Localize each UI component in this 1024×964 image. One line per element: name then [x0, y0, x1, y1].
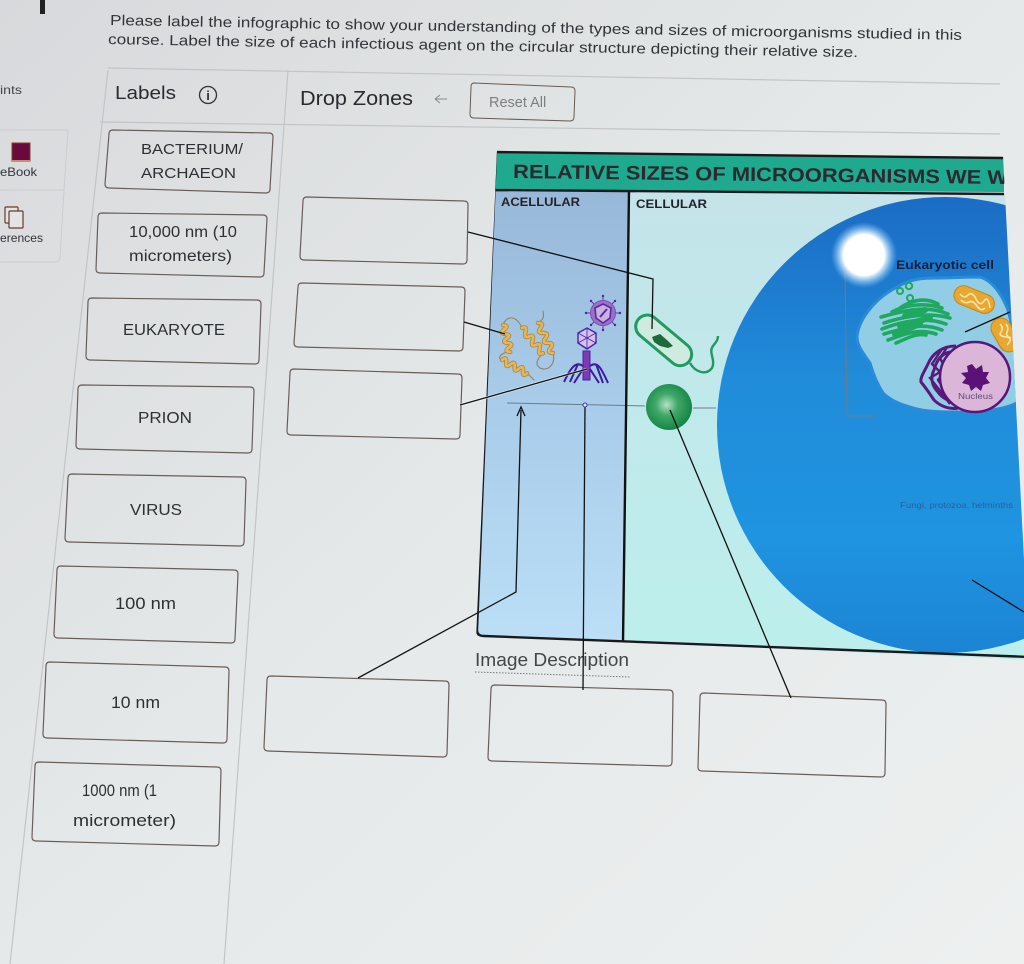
label: bacterium/archaeon — [105, 130, 273, 193]
drop zone 3 — [287, 369, 462, 439]
labels heading — [115, 83, 216, 104]
icon: bacterial sphere — [646, 384, 692, 430]
axis marker — [583, 403, 587, 407]
eukaryotic cell — [857, 258, 1024, 412]
drop zone 5 — [488, 685, 673, 766]
chart frame — [477, 152, 1024, 657]
drop zone 2 — [294, 283, 465, 351]
header bar: RELATIVE SIZES OF MICROORGANISMS WE W — [513, 161, 1009, 189]
reset button — [470, 83, 575, 121]
label: bacterium/archaeon: ARCHAEON — [141, 165, 236, 182]
label: 1000 nm: 1000 nm (1 — [82, 781, 157, 800]
label: eukaryote: EUKARYOTE — [123, 322, 225, 339]
labels heading: Labels — [115, 83, 176, 103]
header bar — [494, 152, 1009, 192]
icon: endoplasmic reticulum — [921, 346, 958, 409]
label: 1000 nm: micrometer) — [73, 811, 176, 830]
icon: ebook — [12, 143, 30, 161]
size axis — [507, 403, 716, 408]
acellular column — [477, 190, 628, 642]
instructions — [108, 13, 962, 61]
label: virus: VIRUS — [130, 502, 182, 519]
label: bacterium/archaeon: BACTERIUM/ — [141, 141, 244, 158]
icon: bacteriophage — [564, 328, 608, 383]
icon: nucleus — [940, 342, 1010, 412]
ebook label: eBook — [0, 165, 38, 179]
instructions: course. Label the size of each infectious agent on the circular structure depicting their relative size. — [108, 32, 858, 61]
icon: undo arrow — [435, 95, 447, 103]
label: 1000 nm — [32, 762, 221, 846]
icon: virus — [585, 295, 621, 331]
drop zone boxes — [264, 197, 886, 777]
points label: ints — [0, 83, 22, 97]
chart: relative sizes — [477, 152, 1024, 660]
label: 10,000 nm: 10,000 nm (10 — [129, 224, 237, 241]
label: 100 nm: 100 nm — [115, 595, 176, 613]
label: 10 nm — [43, 662, 229, 743]
examples caption: Fungi, protozoa, helminths — [900, 500, 1013, 510]
drop zone 6 — [698, 693, 886, 777]
label: 100 nm — [54, 566, 238, 643]
label: prion — [76, 385, 254, 453]
leader lines — [358, 232, 1024, 698]
drop zones heading: Drop Zones — [300, 88, 413, 110]
icon: nucleus: Nucleus — [958, 391, 993, 401]
column divider — [623, 190, 629, 642]
label: 10 nm: 10 nm — [111, 694, 160, 712]
image description link — [475, 650, 630, 677]
icon: references — [5, 207, 23, 228]
labels heading: i — [206, 88, 210, 103]
drop zone 1 — [300, 197, 468, 264]
label: eukaryote — [86, 298, 261, 364]
eukaryote size circle — [717, 197, 1024, 653]
cell membrane — [857, 277, 1024, 412]
label: 10,000 nm: micrometers) — [129, 248, 232, 265]
label cards — [32, 130, 273, 846]
drop zone 4 — [264, 676, 449, 757]
label: 10,000 nm — [96, 213, 267, 277]
cellular heading: CELLULAR — [636, 197, 707, 211]
eukaryotic cell label: Eukaryotic cell — [896, 258, 994, 272]
size bracket — [845, 273, 877, 416]
icon: mitochondria — [953, 285, 1014, 352]
cellular column — [622, 190, 1024, 660]
label: virus — [65, 474, 246, 546]
instructions: Please label the infographic to show your understanding of the types and sizes of microorganisms studied in this — [110, 13, 962, 44]
icon: golgi — [881, 283, 950, 343]
label: prion: PRION — [138, 410, 192, 427]
icon: bacterium — [631, 310, 718, 372]
glare — [831, 222, 897, 288]
reset button: Reset All — [489, 95, 546, 111]
image description link: Image Description — [475, 650, 629, 670]
references label: erences — [0, 231, 43, 245]
acellular heading: ACELLULAR — [501, 195, 580, 209]
icon: prion — [500, 311, 554, 380]
